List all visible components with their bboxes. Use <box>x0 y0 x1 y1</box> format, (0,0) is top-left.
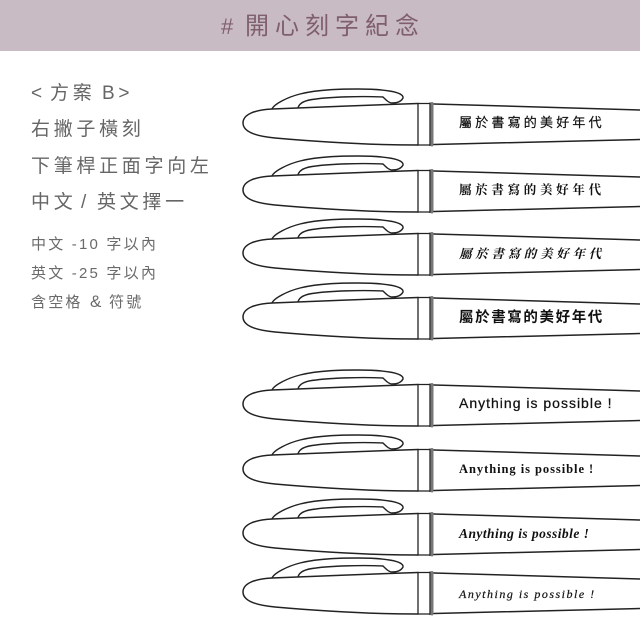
pen 8: English formal script engraving: Anything is possible ! <box>458 587 596 601</box>
plan description text: 中文 <box>31 191 76 213</box>
pen 3: Chinese calligraphic engraving <box>243 219 640 276</box>
plan description text: B> <box>102 83 133 104</box>
pen 5: English sans engraving <box>243 370 640 426</box>
character limit notes: 中文 -10 字以內 <box>31 236 158 253</box>
plan description text: 英文擇一 <box>97 191 188 213</box>
plan description text: 方案 <box>50 82 95 104</box>
pen 7: English brush script engraving: Anything is possible ! <box>458 526 589 541</box>
pen 4: Chinese bold engraving <box>243 283 640 340</box>
pen 1: Chinese sans engraving <box>243 89 640 146</box>
pen 7: English brush script engraving <box>243 499 640 556</box>
pen 2: Chinese Ming-style engraving <box>243 156 640 212</box>
pen 3: Chinese calligraphic engraving: 屬於書寫的美好年代 <box>459 247 605 261</box>
plan description text: 右撇子橫刻 <box>31 118 145 140</box>
heading: 開心刻字紀念 <box>245 13 425 40</box>
header band <box>0 0 640 51</box>
character limit notes: & <box>90 292 102 311</box>
character limit notes: 符號 <box>109 293 143 311</box>
plan description text <box>31 82 213 213</box>
pen 6: English blackletter engraving <box>243 435 640 492</box>
pen 8: English formal script engraving <box>243 558 640 614</box>
plan description text: 下筆桿正面字向左 <box>31 155 213 177</box>
plan description text: / <box>81 192 90 213</box>
pen 5: English sans engraving: Anything is possible ! <box>459 395 613 411</box>
character limit notes: 英文 -25 字以內 <box>31 265 158 282</box>
character limit notes <box>31 236 158 311</box>
pen 4: Chinese bold engraving: 屬於書寫的美好年代 <box>459 308 604 326</box>
pen 2: Chinese Ming-style engraving: 屬於書寫的美好年代 <box>459 182 605 197</box>
heading: # <box>221 14 239 39</box>
plan description text: < <box>31 83 46 104</box>
pen 6: English blackletter engraving: Anything is possible ! <box>459 462 594 476</box>
pen 1: Chinese sans engraving: 屬於書寫的美好年代 <box>459 115 605 130</box>
character limit notes: 含空格 <box>31 294 83 311</box>
